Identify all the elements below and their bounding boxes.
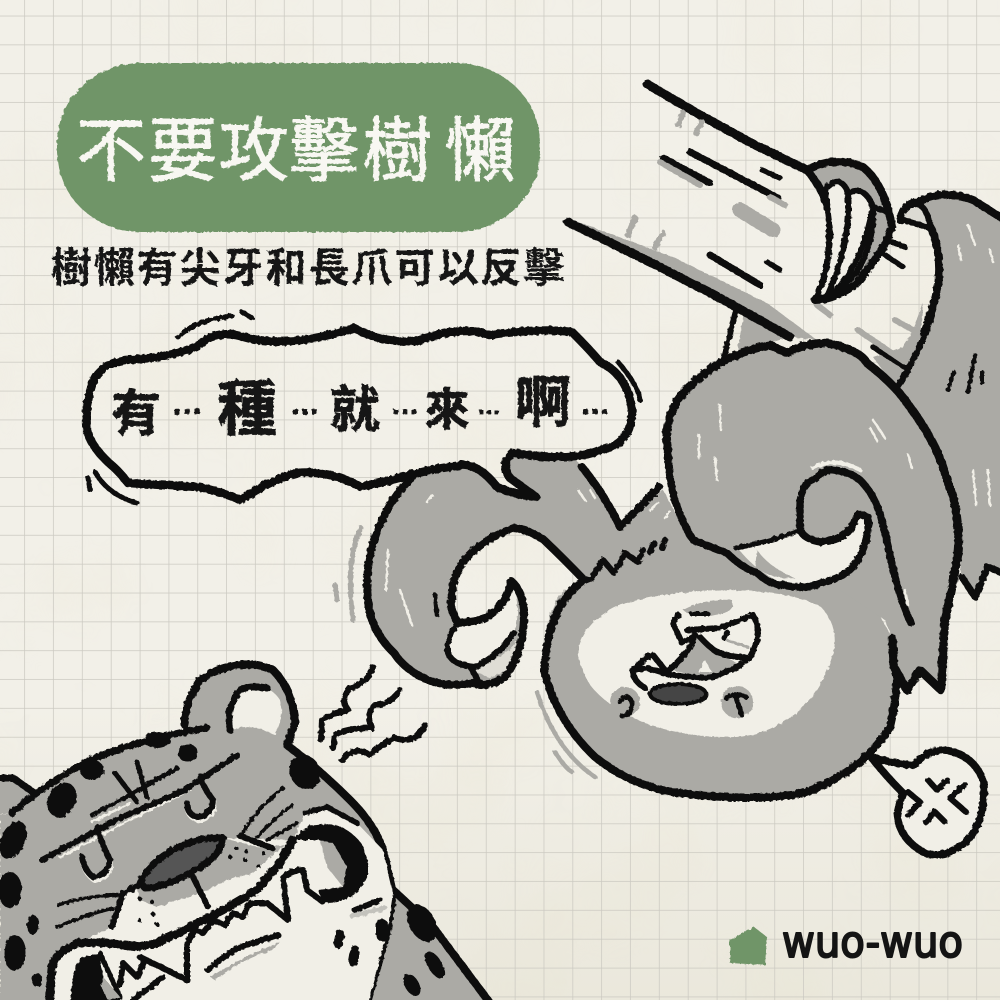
wavy vibration marks [321, 667, 425, 760]
angry speech bubble [871, 750, 984, 855]
bubble text: 來 [424, 384, 470, 435]
logo [730, 917, 963, 968]
branch claw [807, 162, 892, 300]
leopard nose and snout [112, 836, 272, 927]
speech bubble [87, 312, 640, 503]
bubble text: … [580, 388, 610, 421]
bubble text: 就 [330, 382, 380, 438]
sloth body [537, 530, 897, 798]
bubble text: 種 [217, 376, 277, 443]
leopard head fill and ear [0, 664, 490, 1000]
title pill [57, 63, 540, 232]
bubble text [111, 371, 610, 443]
sloth left arm [335, 453, 700, 686]
bubble text: … [290, 388, 320, 421]
leopard eyes and brow [42, 755, 297, 927]
title pill: 不要攻擊樹懶 [76, 112, 515, 190]
leopard [0, 664, 490, 1000]
bubble text: … [171, 385, 203, 421]
back hair [895, 195, 1000, 597]
sloth face [578, 590, 835, 737]
bubble text: 啊 [515, 371, 571, 434]
sloth illustration [335, 84, 1000, 798]
bubble text: … [477, 393, 501, 420]
subtitle: 樹懶有尖牙和長爪可以反擊 [50, 245, 564, 291]
logo house icon [730, 927, 767, 965]
bubble outline [87, 312, 640, 503]
leopard spots [0, 732, 449, 999]
branch [568, 84, 923, 387]
sloth right arm [663, 343, 958, 690]
bubble text: 有 [111, 386, 161, 442]
leopard mouth [50, 807, 393, 1000]
bubble text: … [391, 389, 419, 420]
logo wordmark: wuo-wuo [782, 917, 963, 968]
